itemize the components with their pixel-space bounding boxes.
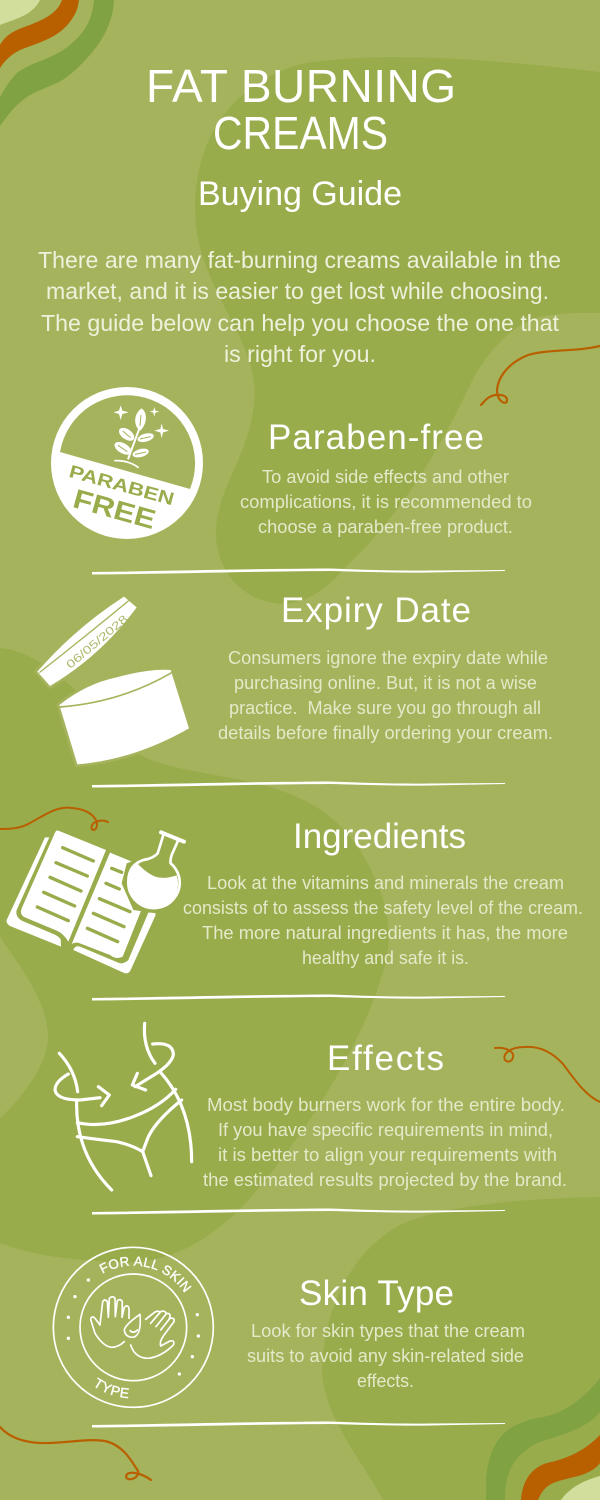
body text — [247, 1321, 525, 1391]
body text: To avoid side effects and other — [262, 467, 509, 487]
body text: consists of to assess the safety level of the cream. — [183, 898, 583, 918]
intro text: There are many fat-burning creams available in the — [38, 247, 561, 273]
body text: purchasing online. But, it is not a wise — [234, 673, 537, 693]
top-left corner waves — [0, 0, 114, 126]
icon: paraben free badge — [51, 387, 203, 539]
icon: paraben free badge: PARABEN — [67, 461, 176, 509]
heading: Effects — [327, 1039, 444, 1078]
body text — [218, 648, 553, 743]
body text: If you have specific requirements in mind, — [218, 1120, 553, 1140]
body text: practice. Make sure you go through all — [229, 698, 541, 718]
body text: effects. — [357, 1371, 414, 1391]
body text: Consumers ignore the expiry date while — [228, 648, 548, 668]
body text — [183, 873, 583, 968]
divider 2 — [92, 782, 505, 788]
body text — [240, 467, 532, 537]
body text: choose a paraben-free product. — [258, 517, 513, 537]
body text: Most body burners work for the entire body. — [207, 1095, 565, 1115]
subtitle: Buying Guide — [198, 175, 402, 213]
icon: paraben free badge: FREE — [70, 484, 159, 535]
heading: Expiry Date — [281, 591, 471, 630]
icon: book and flask — [7, 831, 184, 973]
body text: healthy and safe it is. — [302, 948, 469, 968]
panel: expiry date — [37, 591, 553, 764]
icon: waist with arrows — [55, 1023, 192, 1190]
decorative squiggle: bottom left — [0, 1427, 151, 1480]
icon: cream jar — [37, 597, 189, 764]
body text — [203, 1095, 567, 1190]
body text: suits to avoid any skin-related side — [247, 1346, 524, 1366]
panel: effects — [55, 1023, 567, 1190]
divider 5 — [92, 1422, 505, 1428]
body text: Look at the vitamins and minerals the cream — [207, 873, 564, 893]
intro text — [38, 247, 561, 367]
intro text: is right for you. — [224, 341, 376, 367]
icon: for all skin type stamp: FOR ALL SKIN — [99, 1256, 192, 1292]
icon: cream jar: 06/05/2028 — [64, 613, 130, 671]
decorative squiggle: effects — [495, 1047, 600, 1102]
panel: skin type — [52, 1246, 525, 1408]
decorative squiggle: top right — [481, 346, 600, 405]
heading: Ingredients — [293, 817, 466, 856]
title — [146, 60, 456, 159]
divider 1 — [92, 568, 505, 574]
body text: The more natural ingredients it has, the more — [202, 923, 568, 943]
intro text: market, and it is easier to get lost while choosing. — [46, 278, 549, 304]
body text: Look for skin types that the cream — [251, 1321, 525, 1341]
body text: complications, it is recommended to — [240, 492, 532, 512]
body text: the estimated results projected by the brand. — [203, 1170, 567, 1190]
heading: Paraben-free — [268, 418, 484, 457]
heading: Skin Type — [299, 1274, 454, 1313]
divider 4 — [92, 1208, 505, 1214]
title: FAT BURNING — [146, 60, 456, 112]
body text: it is better to align your requirements with — [218, 1145, 557, 1165]
body text: details before finally ordering your cream. — [218, 723, 553, 743]
panel: ingredients — [7, 817, 583, 973]
intro text: The guide below can help you choose the one that — [41, 310, 559, 336]
icon: for all skin type stamp: TYPE — [95, 1377, 129, 1398]
decorative squiggle: ingredients — [0, 808, 108, 830]
title: CREAMS — [213, 107, 388, 159]
icon: for all skin type stamp — [52, 1246, 214, 1408]
panel: paraben-free — [51, 387, 532, 539]
divider 3 — [92, 994, 505, 1000]
bottom-right corner waves — [486, 1378, 600, 1500]
